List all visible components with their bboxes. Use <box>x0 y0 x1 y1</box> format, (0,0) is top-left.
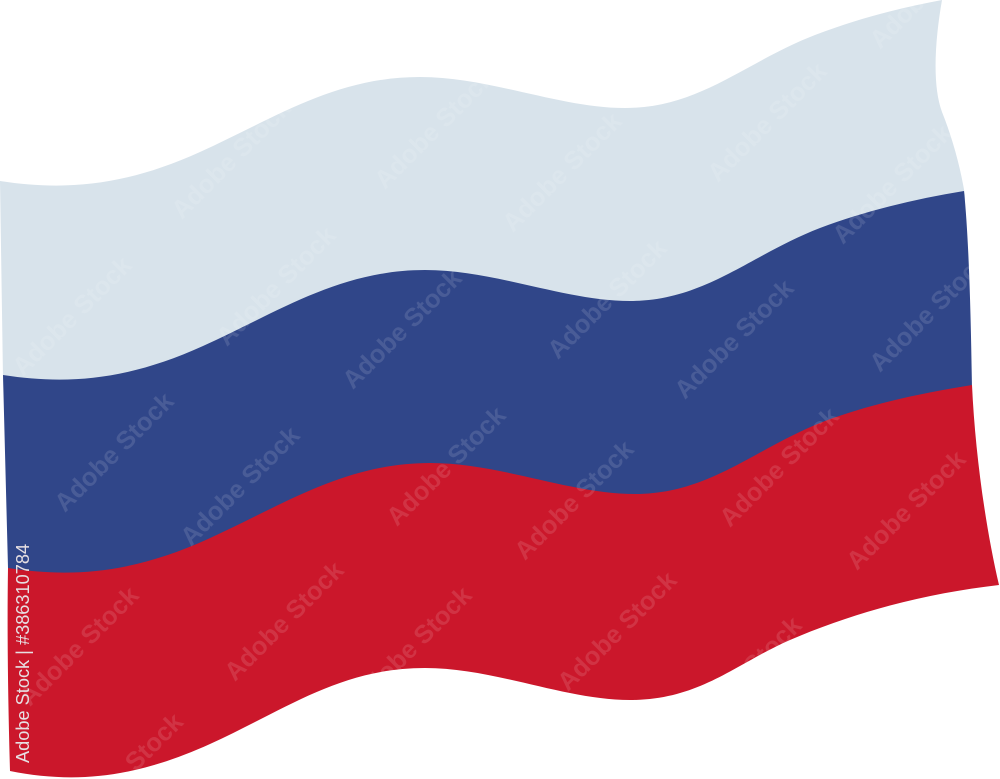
watermark: repeated Adobe Stock text: Stock <box>452 709 521 779</box>
flag stripe: white top <box>0 0 966 440</box>
watermark: repeated Adobe Stock text: Adobe Stock <box>337 264 468 394</box>
watermark: repeated Adobe Stock text: Adobe Stock <box>369 64 500 194</box>
watermark: repeated Adobe Stock text: Adobe Stock <box>841 445 972 575</box>
watermark: repeated Adobe Stock text: Adobe Stock <box>175 421 306 551</box>
watermark: repeated Adobe Stock text: Adobe Stock <box>347 581 478 711</box>
watermark: repeated Adobe Stock text: Adobe Stock <box>39 54 170 184</box>
watermark: repeated Adobe Stock text: Stock <box>120 707 189 777</box>
watermark: repeated Adobe Stock text: Adobe Stock <box>14 581 145 711</box>
watermark: repeated Adobe Stock text: Adobe Stock <box>381 401 512 531</box>
watermark: repeated Adobe Stock text: Adobe Stock <box>166 94 297 224</box>
watermark: repeated Adobe Stock text: Adobe Stock <box>497 107 628 237</box>
watermark: repeated Adobe Stock text: Adobe Stock <box>49 387 180 517</box>
watermark: repeated Adobe Stock text: Adobe Stock <box>677 611 808 741</box>
watermark: repeated Adobe Stock text: Stock <box>788 709 857 779</box>
flag stripe: red bottom <box>8 385 999 777</box>
watermark: repeated Adobe Stock text: Adobe Stock <box>542 234 673 364</box>
flag stripe: blue middle <box>3 191 972 650</box>
watermark: repeated Adobe Stock text: Adobe Stock <box>219 556 350 686</box>
watermark: repeated Adobe Stock text: Adobe Stock <box>827 119 958 249</box>
watermark: repeated Adobe Stock text: Adobe Stock <box>714 402 845 532</box>
watermark: repeated Adobe Stock text: Adobe Stock <box>7 251 138 381</box>
watermark: repeated Adobe Stock text: Adobe Stock <box>864 247 995 377</box>
watermark: repeated Adobe Stock text: Adobe Stock <box>867 591 998 721</box>
watermark: repeated Adobe Stock text: Adobe Stock <box>211 221 342 351</box>
watermark: repeated Adobe Stock text: Adobe Stock <box>669 274 800 404</box>
stock attribution label: Adobe Stock | #386310784 <box>13 544 33 763</box>
watermark: repeated Adobe Stock text: Adobe Stock <box>552 566 683 696</box>
watermark: repeated Adobe Stock text: Adobe Stock <box>509 435 640 565</box>
watermark: repeated Adobe Stock text: Adobe Stock <box>702 57 833 187</box>
